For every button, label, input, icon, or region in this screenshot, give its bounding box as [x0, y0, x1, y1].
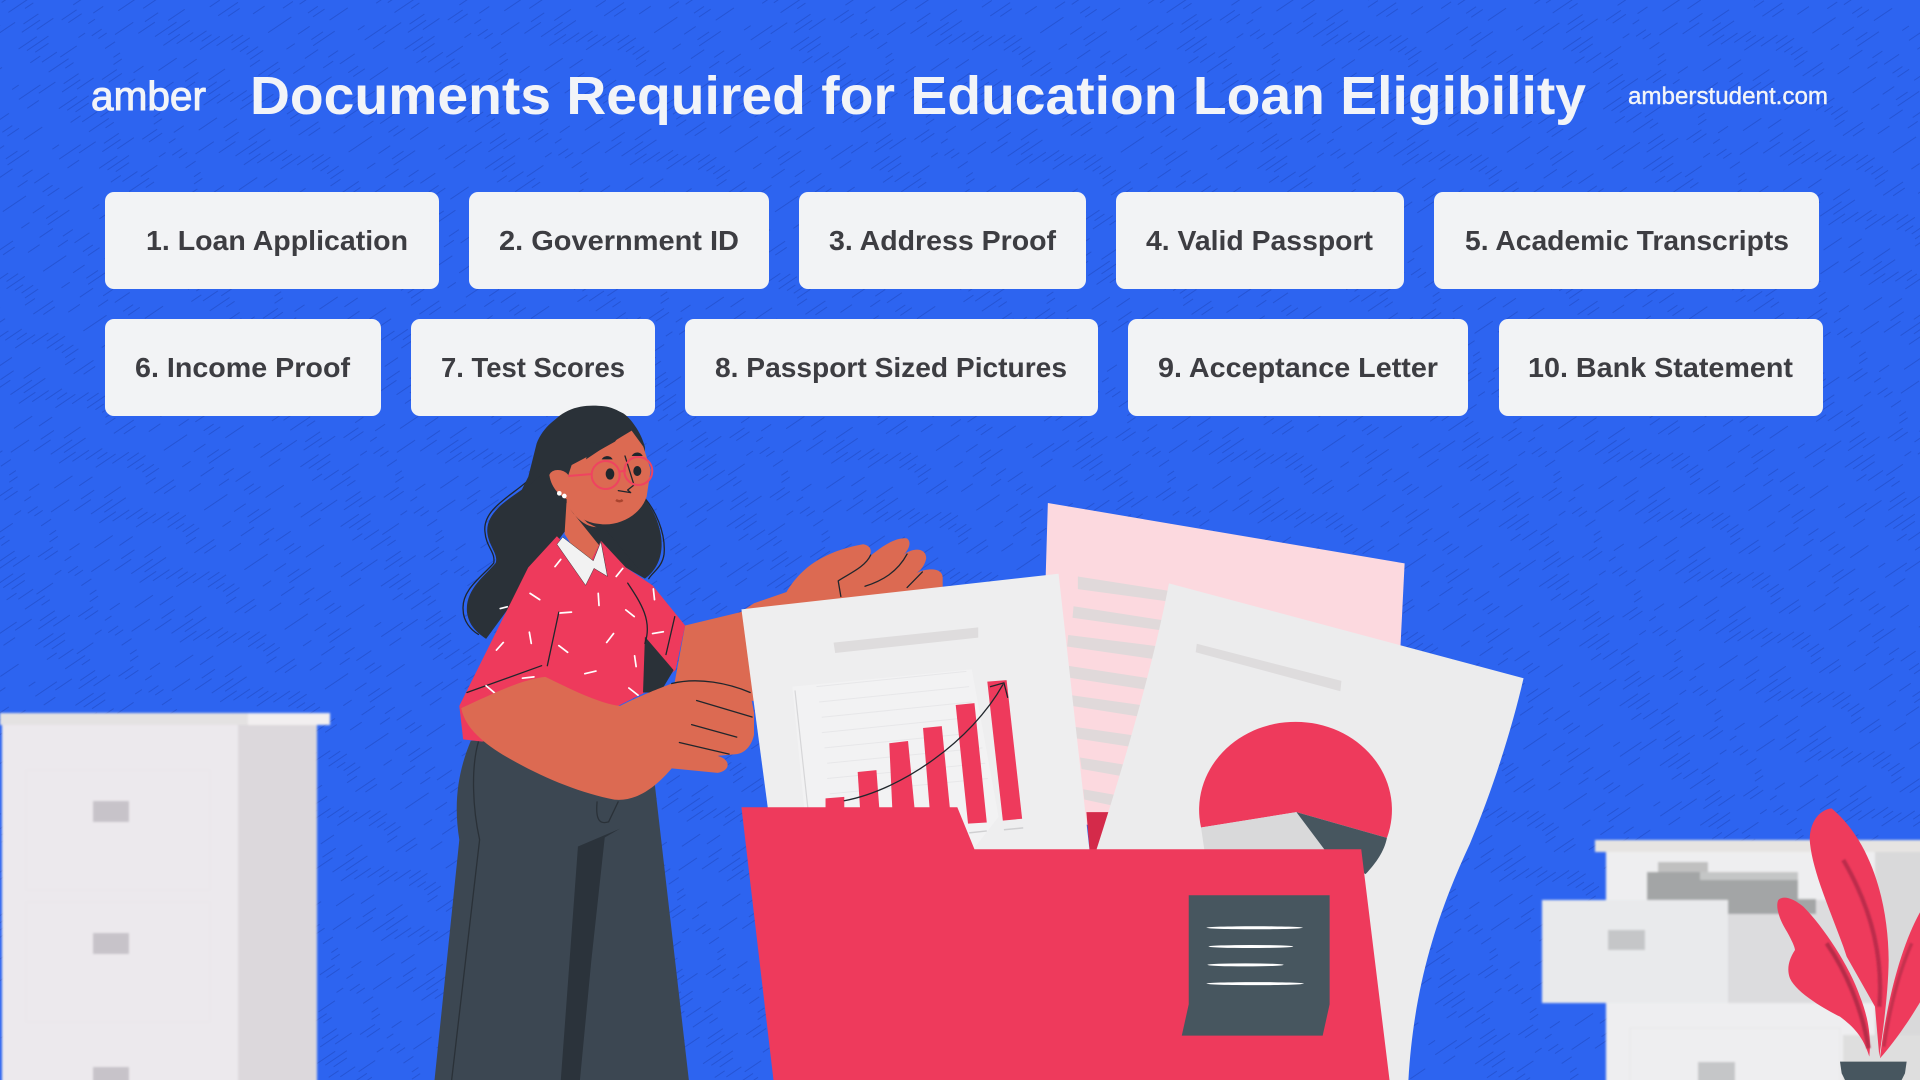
- left filing cabinet: [0, 713, 330, 1080]
- card 9: [1128, 319, 1468, 416]
- chart document: [741, 574, 1090, 851]
- near hand finger lines: [672, 681, 752, 754]
- card 7: [411, 319, 655, 416]
- card 5: [1434, 192, 1819, 289]
- card 8: 8. Passport Sized Pictures: [715, 352, 1067, 383]
- card 1: [105, 192, 439, 289]
- card 3: 3. Address Proof: [829, 225, 1057, 256]
- shirt: [459, 536, 685, 742]
- near arm and hand: [461, 677, 754, 800]
- hair top and fringe: [520, 407, 644, 493]
- card 6: [105, 319, 381, 416]
- folder label: [1182, 895, 1330, 1036]
- card 10: [1499, 319, 1823, 416]
- pie chart document: [1097, 583, 1524, 1080]
- face: [567, 431, 651, 524]
- header: [91, 66, 1828, 126]
- card 4: [1116, 192, 1404, 289]
- card 2: [469, 192, 769, 289]
- illustration: documents folder: [741, 503, 1524, 1080]
- pink document: [1046, 503, 1405, 863]
- ear: [549, 470, 568, 500]
- card 5: 5. Academic Transcripts: [1465, 225, 1789, 256]
- plant: [1777, 808, 1920, 1080]
- card 10: 10. Bank Statement: [1528, 352, 1793, 383]
- card 7: 7. Test Scores: [441, 352, 625, 383]
- nose: [618, 456, 634, 493]
- eyes and brows: [602, 452, 643, 480]
- card 6: 6. Income Proof: [135, 352, 351, 383]
- earrings: [557, 491, 567, 498]
- hair back: [463, 406, 664, 639]
- card 2: 2. Government ID: [499, 225, 739, 256]
- illustration: woman: [434, 406, 943, 1080]
- mouth: [616, 500, 623, 501]
- trousers: [434, 737, 689, 1080]
- head: [520, 407, 652, 524]
- red folder: [741, 807, 1390, 1080]
- glasses: [568, 457, 652, 489]
- card 4: 4. Valid Passport: [1146, 225, 1373, 256]
- pie chart: [1199, 722, 1392, 874]
- card 9: 9. Acceptance Letter: [1158, 352, 1438, 383]
- title: Documents Required for Education Loan Eligibility: [250, 66, 1586, 126]
- card 3: [799, 192, 1086, 289]
- trend arrow: [844, 683, 1008, 801]
- card 8: [685, 319, 1098, 416]
- cards: document list: [105, 192, 1823, 416]
- far arm and hand: [674, 538, 943, 701]
- website: amberstudent.com: [1628, 83, 1828, 110]
- neck: [565, 503, 645, 576]
- right filing cabinet: [1542, 840, 1920, 1080]
- logo: amber: amber: [91, 73, 206, 119]
- bar chart: [826, 680, 1022, 824]
- card 1: 1. Loan Application: [146, 225, 408, 256]
